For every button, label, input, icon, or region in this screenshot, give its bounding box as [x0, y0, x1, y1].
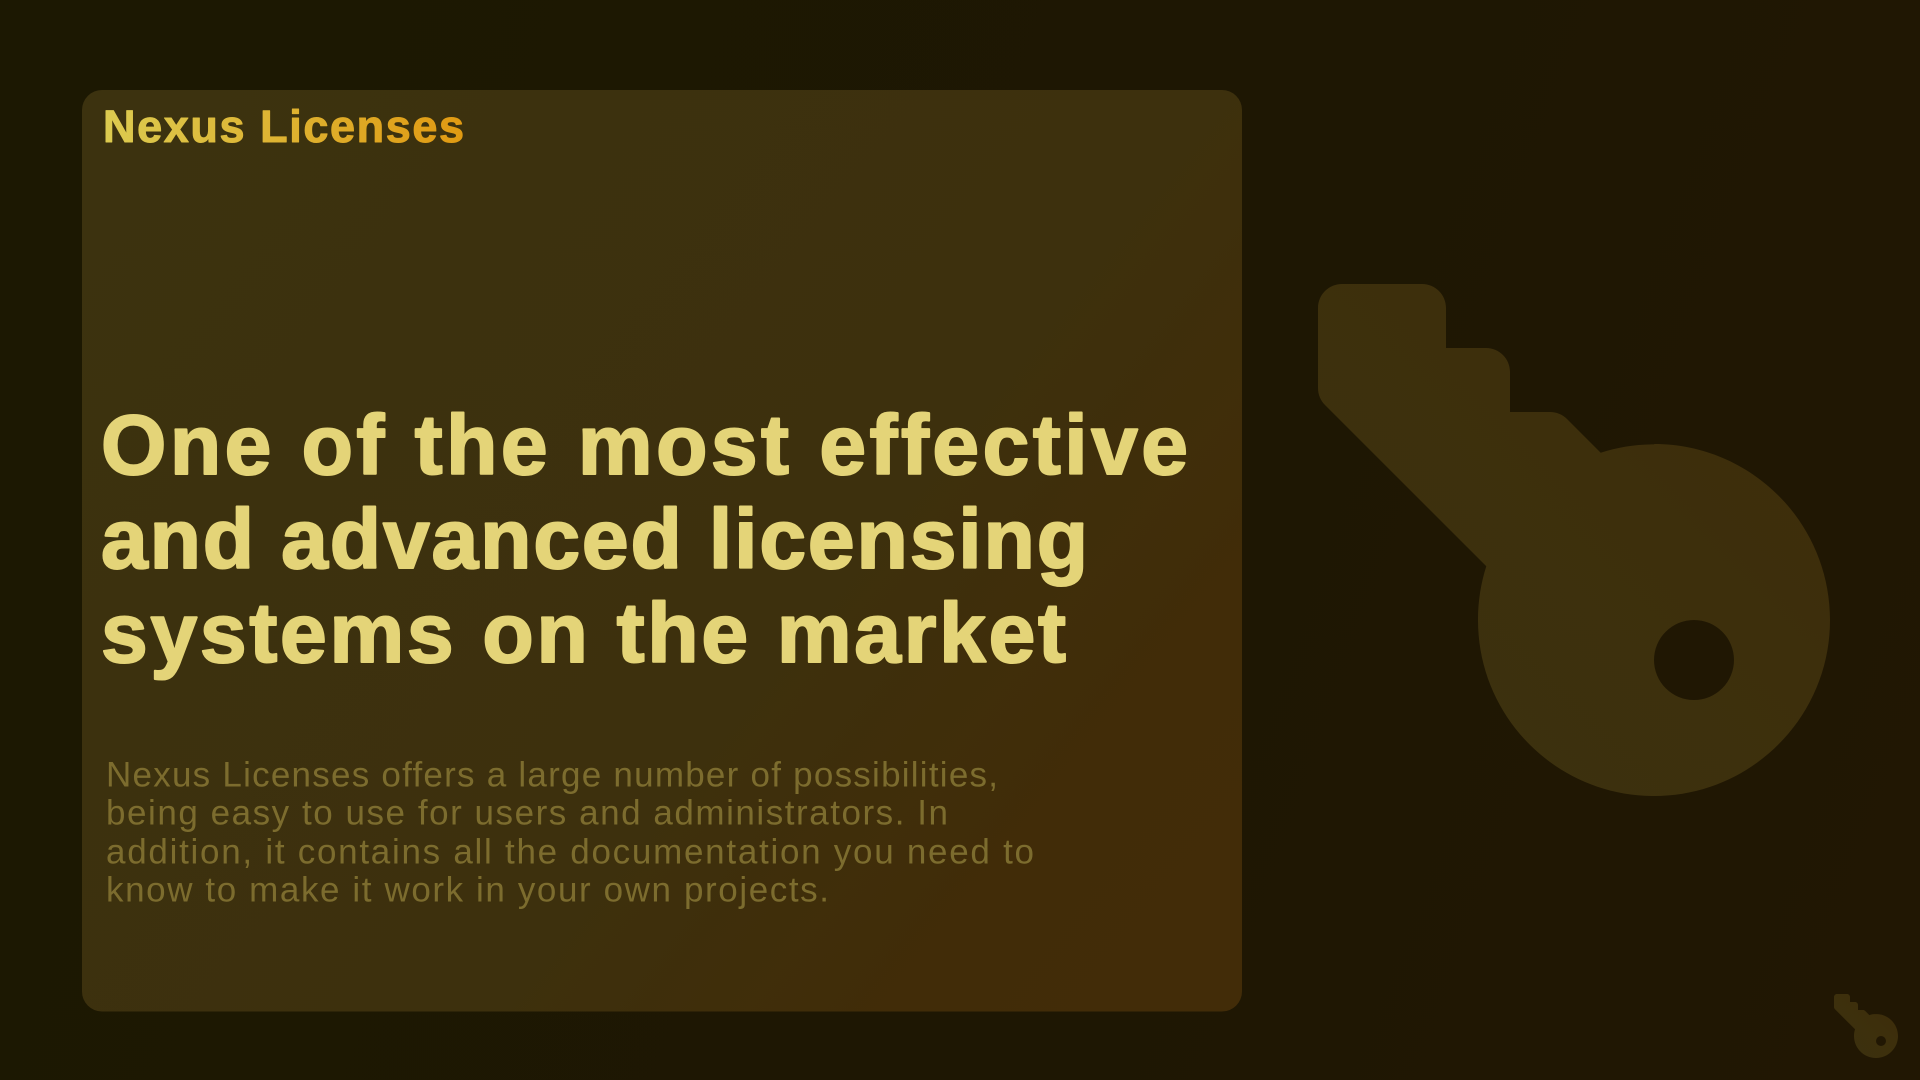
headline: and advanced licensing	[101, 492, 1088, 586]
description paragraph: being easy to use for users and administrators. In	[106, 794, 948, 832]
description paragraph: know to make it work in your own projects.	[106, 870, 829, 910]
headline: systems on the market	[101, 586, 1066, 680]
description paragraph	[106, 756, 1034, 910]
description paragraph: addition, it contains all the documentation you need to	[106, 832, 1034, 872]
headline	[101, 398, 1188, 680]
icon: large key	[1318, 284, 1830, 796]
brand name: Nexus Licenses	[103, 101, 464, 152]
icon: small key logo	[1834, 994, 1898, 1058]
panel: main content card	[82, 90, 1242, 1012]
description paragraph: Nexus Licenses offers a large number of possibilities,	[106, 756, 998, 794]
headline: One of the most effective	[101, 398, 1188, 492]
